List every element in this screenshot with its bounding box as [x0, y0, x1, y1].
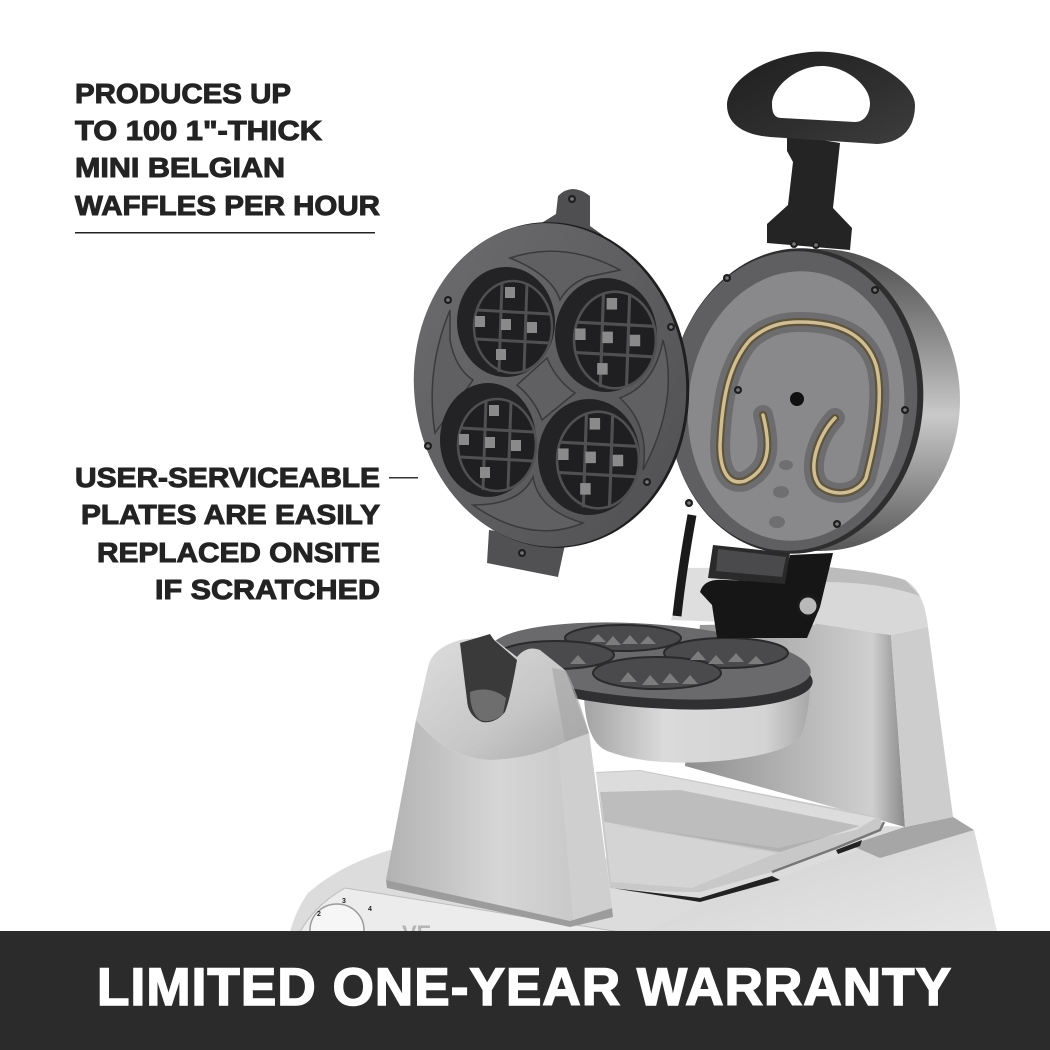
text block: user-serviceable plates: IF SCRATCHED: [155, 574, 380, 605]
handle neck: [767, 134, 852, 250]
waffle maker base: [290, 515, 997, 956]
right tower top cap: [813, 567, 928, 635]
text block: production capacity: [75, 78, 380, 221]
lower plate: [487, 613, 815, 719]
waffle plate removable: [400, 189, 703, 577]
drip tray: [596, 770, 884, 902]
tower slot: [460, 634, 517, 722]
warranty banner: [0, 931, 1050, 1050]
plate body: [401, 211, 703, 559]
heater recess shadow: [720, 322, 879, 493]
base right face: [648, 830, 997, 932]
text block: production capacity: PRODUCES UP: [75, 78, 291, 109]
text block: production capacity: MINI BELGIAN: [75, 152, 285, 183]
control panel and dial: 2: [317, 911, 321, 918]
control panel and dial: 4: [368, 906, 372, 913]
waffle wells: [440, 267, 657, 515]
text block: production capacity: WAFFLES PER HOUR: [75, 190, 380, 221]
control panel and dial: [300, 888, 620, 956]
banner text: LIMITED ONE-YEAR WARRANTY: [97, 958, 951, 1017]
heating element: [720, 322, 879, 493]
right tower top band: [823, 567, 920, 596]
plate screws and holes: [424, 195, 675, 557]
hinge ball: [798, 596, 818, 616]
waffle grids: [458, 281, 656, 508]
control panel and dial: VE: [402, 921, 431, 946]
plate tabs: [540, 189, 604, 236]
lid screws: [685, 240, 909, 528]
plate panels: [432, 251, 668, 531]
lid hinge bracket: [708, 545, 790, 584]
lid outer shell: [680, 249, 960, 551]
text block: user-serviceable plates: REPLACED ONSITE: [97, 537, 380, 568]
underline rule: [75, 232, 375, 234]
handle grip: [727, 52, 915, 144]
text block: user-serviceable plates: [75, 462, 380, 605]
text block: user-serviceable plates: PLATES ARE EASILY: [81, 499, 380, 530]
control panel and dial: 3: [342, 898, 346, 905]
left tower: [386, 634, 613, 927]
right tower rear edge: [671, 567, 827, 625]
text block: user-serviceable plates: USER-SERVICEABLE: [75, 462, 380, 493]
lower waffle wells: [498, 625, 788, 689]
base top shadow strip: [850, 817, 974, 858]
lid inner tray: [674, 260, 918, 552]
right tower front face: [891, 627, 953, 827]
upper lid and handle: [654, 52, 960, 638]
lid dark ring: [654, 236, 938, 566]
right tower back face: [685, 623, 905, 827]
callout line: [389, 477, 418, 478]
lid bosses: [769, 460, 793, 528]
power cord: [677, 515, 692, 616]
center hole: [790, 392, 804, 406]
hinge: [700, 553, 833, 638]
lid inner face: [654, 239, 932, 563]
text block: production capacity: TO 100 1"-THICK: [75, 115, 322, 146]
lower pan: [584, 678, 810, 763]
bracket plate: [716, 549, 786, 577]
base housing: [290, 826, 997, 932]
